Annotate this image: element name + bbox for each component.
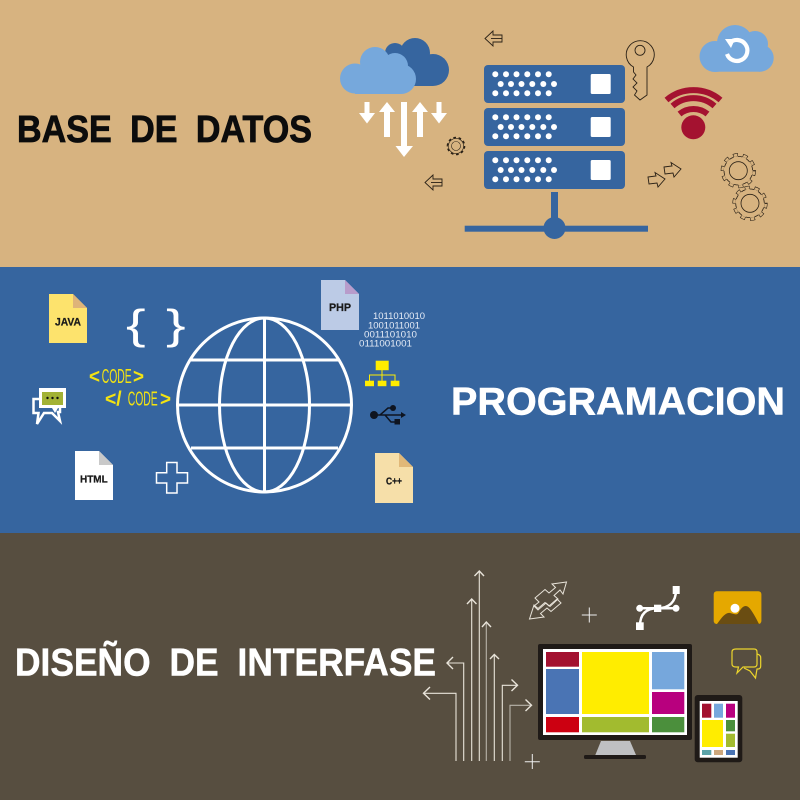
icon: curly braces: {: [126, 301, 146, 348]
icon: key: [626, 41, 654, 100]
code text: </: [105, 388, 122, 410]
icon: cloud with refresh: [700, 25, 774, 72]
icon: small gear: [448, 138, 464, 154]
icon: html file: [75, 451, 113, 500]
heading: programacion: PROGRAMACION: [451, 380, 785, 424]
icon: org chart: [365, 361, 399, 386]
heading: base de datos: BASE DE DATOS: [17, 109, 312, 151]
binary text: 0111001001: [359, 338, 412, 350]
code text: [89, 366, 171, 410]
icon: php file: PHP: [329, 302, 351, 314]
icon: wifi: [666, 90, 720, 139]
code text: <: [89, 366, 100, 388]
icon: php file: [321, 280, 359, 330]
icon: large gears: [722, 155, 766, 219]
code text: >: [160, 388, 171, 410]
icon: zigzag double arrow: [530, 582, 566, 619]
panel: diseño de interfase: [0, 533, 800, 800]
icon: html file: HTML: [80, 474, 108, 486]
icon: image: [714, 591, 761, 624]
icon: yellow chat bubbles: [732, 649, 761, 678]
icon: back cloud: [385, 38, 449, 86]
icon: outlined plus: [156, 462, 188, 493]
panel: programacion: [0, 267, 800, 533]
code text: CODE: [128, 388, 158, 410]
heading: diseño de interfase: DISEÑO DE INTERFASE: [15, 640, 436, 684]
binary text: 1001011001: [368, 320, 420, 332]
icon: front cloud: [340, 47, 416, 94]
icon: globe: [178, 318, 352, 492]
icon: usb: [370, 405, 406, 424]
icon: left arrow bottom: [425, 175, 442, 190]
code text: >: [133, 366, 144, 388]
icon: c++ file: [375, 453, 413, 503]
panel: base de datos: [0, 0, 800, 267]
icon: curly braces: [126, 301, 186, 348]
icon: left arrow top: [485, 31, 502, 46]
binary text: 1011010010: [373, 311, 425, 322]
code text: CODE: [102, 366, 132, 388]
icon: bezier tool: [636, 586, 680, 630]
icon: tablet: [695, 695, 742, 762]
icon: curly braces: }: [166, 301, 186, 348]
plus marks: [525, 608, 597, 769]
icon: desktop monitor: [538, 644, 692, 759]
icon: server racks: [484, 65, 625, 189]
icon: java file: [49, 294, 87, 343]
icon: chat bubbles: [34, 388, 66, 424]
icon: data transfer arrows: [359, 102, 447, 157]
icon: c++ file: C++: [386, 476, 402, 488]
icon: java file: JAVA: [55, 317, 81, 329]
binary text: [359, 311, 425, 350]
icon: right arrows: [648, 162, 681, 187]
icon: network connector: [465, 192, 648, 239]
binary text: 0011101010: [364, 330, 417, 340]
icon: growth arrows: [424, 571, 532, 761]
